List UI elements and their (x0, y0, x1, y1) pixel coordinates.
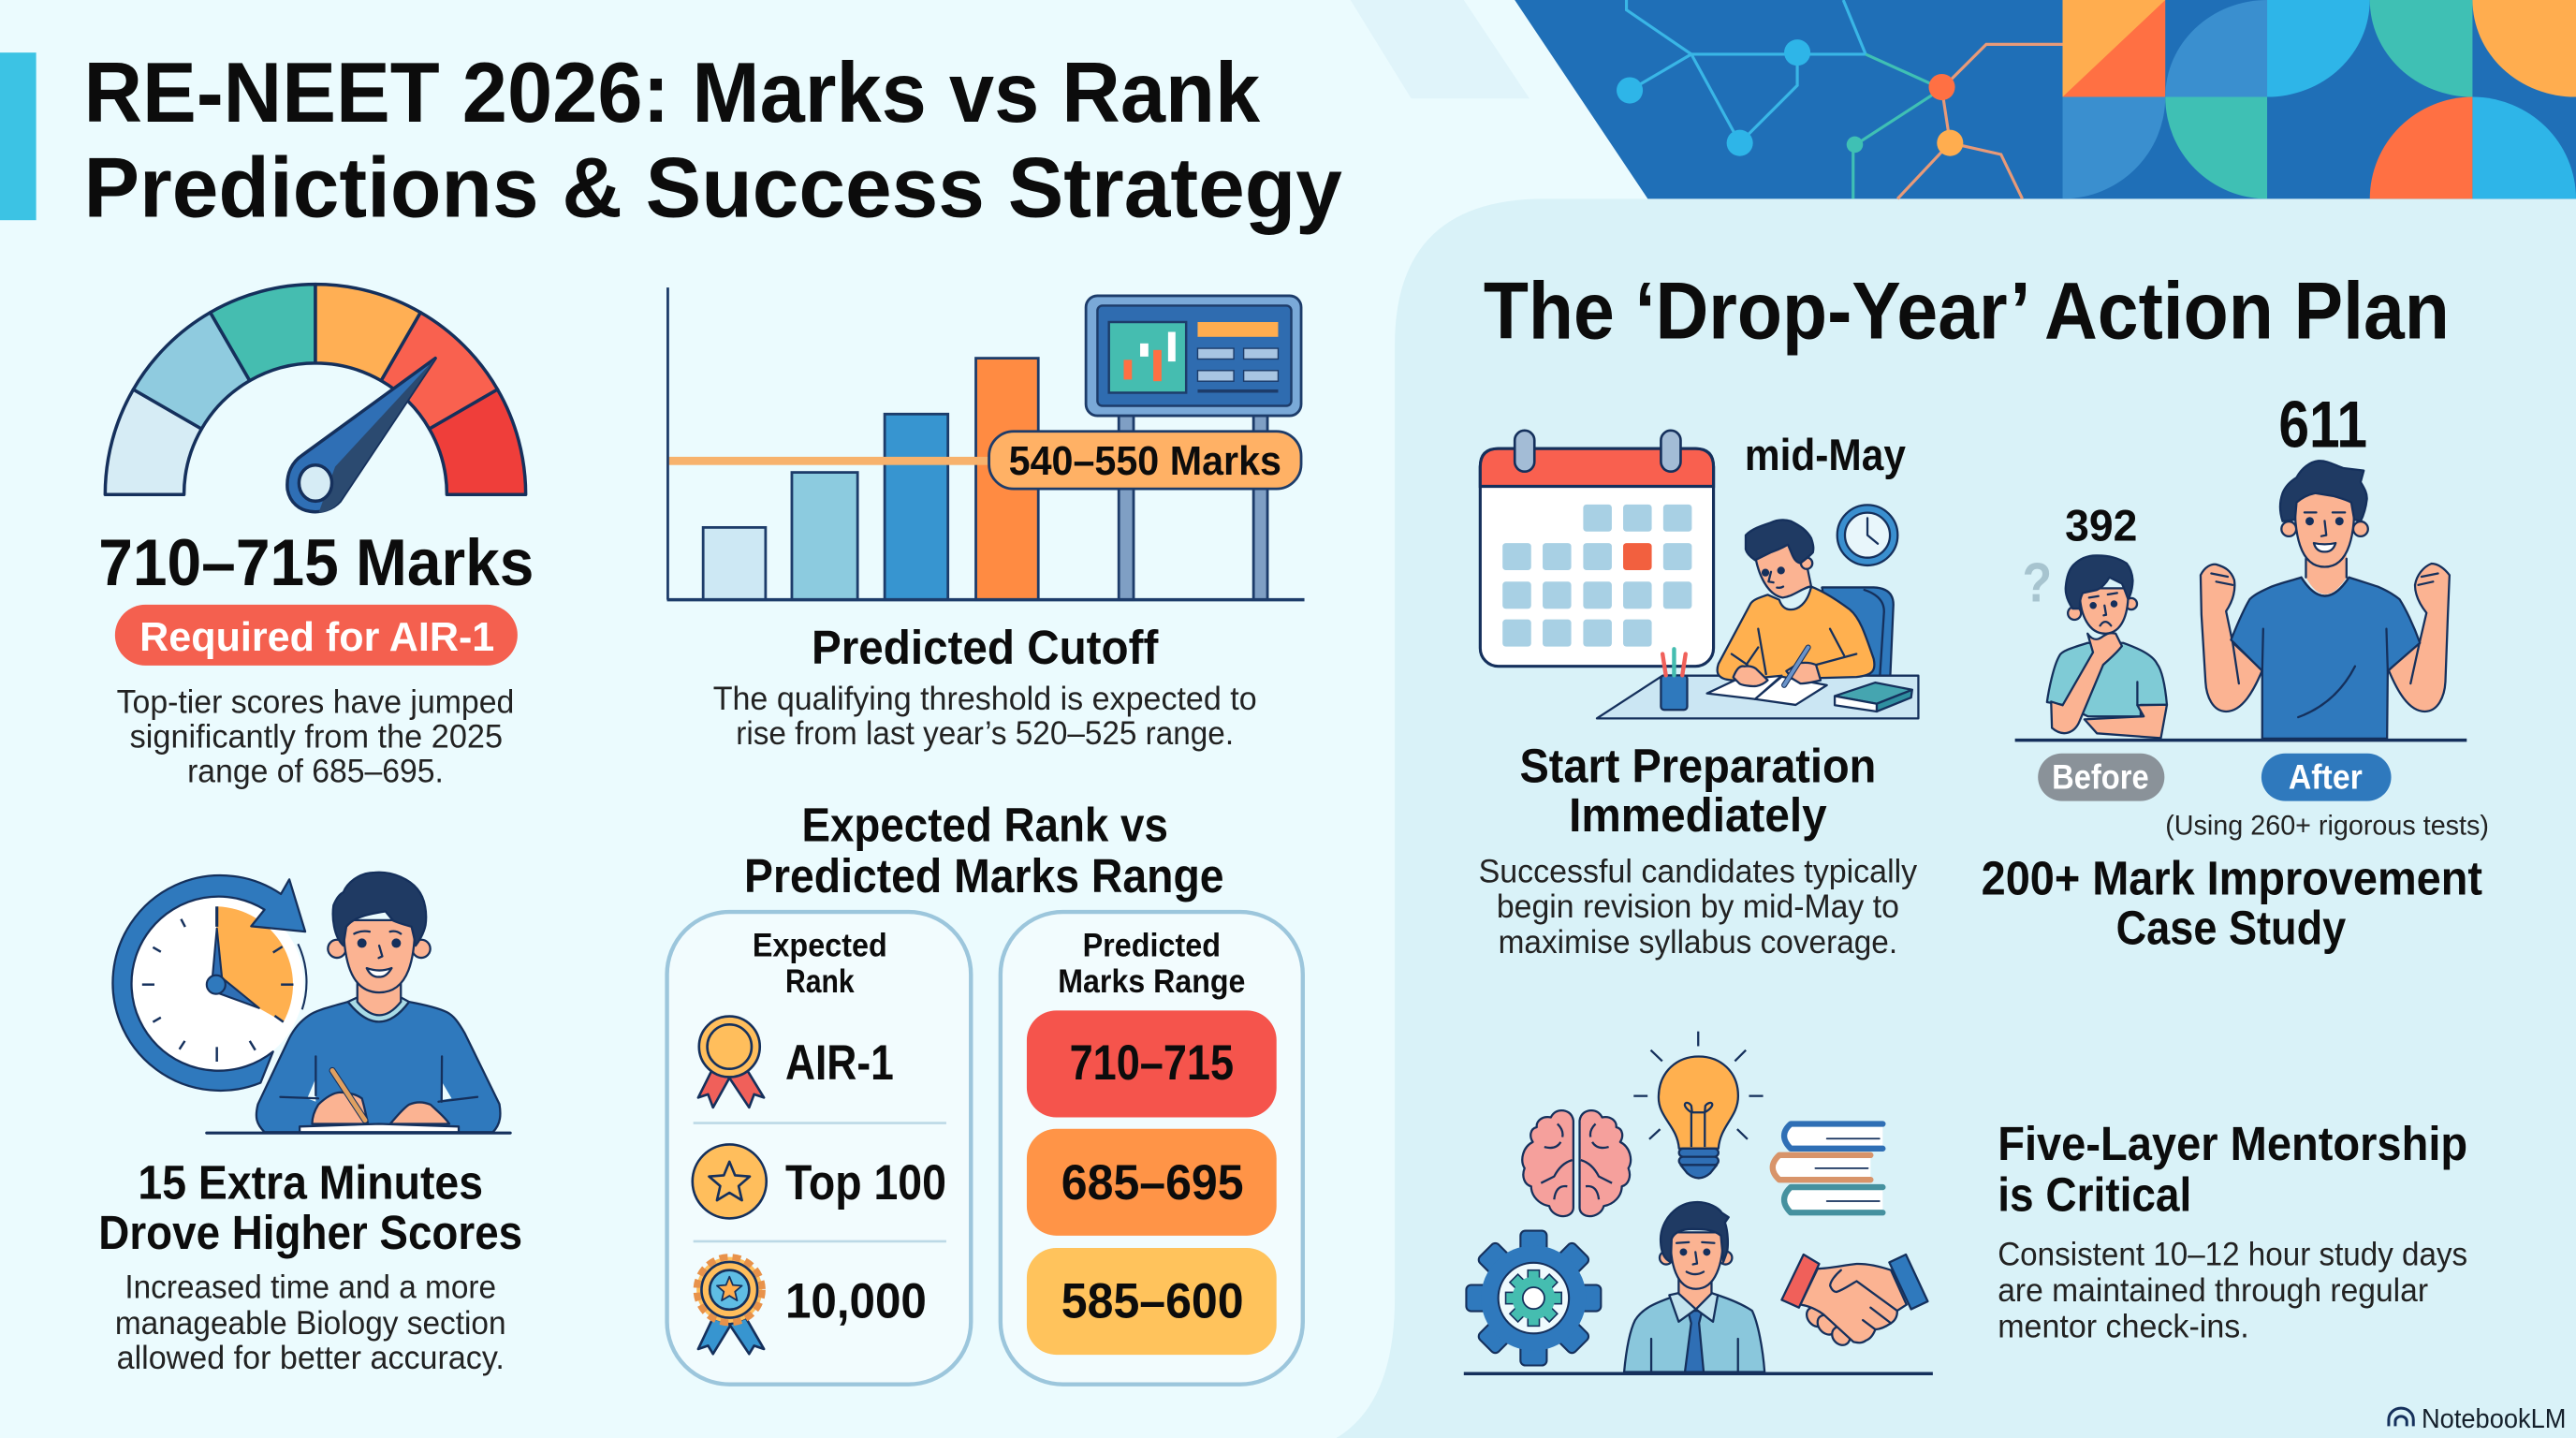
bar chart (667, 287, 1305, 600)
gauge description: range of 685–695. (187, 753, 444, 789)
card: expected rank (667, 912, 971, 1385)
mentorship description (1998, 1236, 2467, 1345)
predicted cutoff heading: Predicted Cutoff (812, 621, 1159, 674)
case study heading: Case Study (2116, 901, 2347, 954)
case study heading (1982, 852, 2482, 954)
after score: 611 (2278, 387, 2367, 461)
card: expected rank: Expected (753, 927, 887, 963)
start preparation description: maximise syllabus coverage. (1499, 924, 1897, 961)
icon: mentor (1624, 1202, 1764, 1372)
before tag: Before (2052, 757, 2149, 796)
panel: start preparation (1479, 431, 1918, 961)
start preparation description: Successful candidates typically (1479, 853, 1918, 889)
card: predicted marks: Marks Range (1058, 963, 1245, 1000)
rank: Top 100: Top 100 (785, 1155, 946, 1211)
mentorship heading: Five-Layer Mentorship (1998, 1117, 2467, 1170)
rank: 10,000: 10,000 (785, 1274, 927, 1329)
after tag (2261, 754, 2392, 801)
extra minutes description: Increased time and a more (124, 1269, 496, 1306)
panel: action plan background (1334, 198, 2576, 1438)
marks pill: 685-695 (1027, 1129, 1277, 1236)
title: RE-NEET 2026: Marks vs Rank (84, 45, 1260, 140)
extra minutes description: manageable Biology section (115, 1305, 506, 1342)
title accent bar (0, 52, 37, 220)
panel: predicted cutoff chart (667, 287, 1305, 752)
extra minutes heading: Drove Higher Scores (98, 1206, 522, 1259)
panel: rank vs marks table (667, 799, 1303, 1385)
before tag (2038, 754, 2164, 801)
mentorship heading: is Critical (1998, 1168, 2191, 1222)
icon: star coin (693, 1144, 767, 1218)
icon: gear (1466, 1231, 1601, 1365)
card: predicted marks: Predicted (1083, 927, 1221, 963)
mentorship description: mentor check-ins. (1998, 1309, 2249, 1345)
icon: calendar (1480, 431, 1714, 667)
icon: stack of books (1773, 1123, 1882, 1212)
start preparation heading (1519, 739, 1876, 842)
start preparation heading: Start Preparation (1519, 739, 1876, 792)
card: predicted marks (1001, 912, 1303, 1385)
icon: brain (1522, 1110, 1631, 1216)
icon: clock with arrow (112, 875, 306, 1091)
big number: 710–715 Marks (98, 525, 534, 599)
icon: light bulb (1633, 1032, 1764, 1178)
icon: question mark: ? (2023, 550, 2052, 613)
predicted cutoff description: rise from last year’s 520–525 range. (736, 715, 1234, 752)
extra minutes heading: 15 Extra Minutes (138, 1155, 483, 1209)
table heading (744, 799, 1224, 902)
panel: AIR-1 marks gauge (98, 285, 534, 789)
pill: required for AIR-1: Required for AIR-1 (139, 614, 494, 660)
marks pill: 685-695: 685–695 (1061, 1155, 1244, 1211)
tests note: (Using 260+ rigorous tests) (2165, 811, 2489, 842)
icon: student at desk with clock (1597, 505, 1918, 718)
extra minutes heading (98, 1155, 522, 1259)
start preparation description (1479, 853, 1918, 961)
gauge chart (105, 285, 526, 513)
icon: rosette badge (696, 1257, 764, 1354)
title (84, 45, 1342, 236)
table heading: Predicted Marks Range (744, 849, 1224, 902)
icon: worried small student (2047, 555, 2167, 738)
predicted cutoff description (713, 681, 1257, 752)
cutoff marks label: 540–550 Marks (1009, 438, 1281, 484)
icon: gold medal (698, 1017, 764, 1108)
gauge description (117, 684, 514, 789)
card: expected rank: Rank (785, 963, 855, 1000)
extra minutes description (115, 1269, 506, 1376)
icon: handshake (1781, 1255, 1927, 1349)
mentorship description: Consistent 10–12 hour study days (1998, 1236, 2467, 1272)
start preparation heading: Immediately (1569, 788, 1827, 842)
icon: display board (1086, 296, 1301, 416)
rank: AIR-1: AIR-1 (785, 1035, 894, 1091)
gauge description: significantly from the 2025 (130, 719, 503, 756)
gauge description: Top-tier scores have jumped (117, 684, 514, 721)
panel: mentorship (1464, 1032, 2467, 1373)
panel: case study (1982, 387, 2489, 954)
pill: required for AIR-1 (115, 605, 518, 666)
NotebookLM watermark: NotebookLM (2422, 1404, 2566, 1434)
extra minutes description: allowed for better accuracy. (117, 1340, 505, 1376)
icon: happy big student (2201, 461, 2450, 739)
marks pill: 710-715: 710–715 (1070, 1035, 1234, 1091)
icon: student writing (207, 873, 510, 1133)
marks pill: 710-715 (1027, 1010, 1277, 1117)
after tag: After (2289, 757, 2363, 796)
title: Predictions & Success Strategy (84, 140, 1342, 236)
before score: 392 (2065, 501, 2137, 550)
panel: extra minutes (98, 873, 522, 1376)
table heading: Expected Rank vs (801, 799, 1168, 852)
header banner with network and geometric pattern (1515, 0, 2576, 198)
start preparation description: begin revision by mid-May to (1497, 888, 1899, 925)
mentorship description: are maintained through regular (1998, 1272, 2428, 1309)
mentorship heading (1998, 1117, 2467, 1222)
label: mid-May: mid-May (1745, 431, 1906, 480)
predicted cutoff description: The qualifying threshold is expected to (713, 681, 1257, 717)
marks pill: 585-600: 585–600 (1061, 1274, 1244, 1329)
action plan heading: The ‘Drop-Year’ Action Plan (1484, 267, 2450, 357)
case study heading: 200+ Mark Improvement (1982, 852, 2482, 905)
marks pill: 585-600 (1027, 1248, 1277, 1355)
